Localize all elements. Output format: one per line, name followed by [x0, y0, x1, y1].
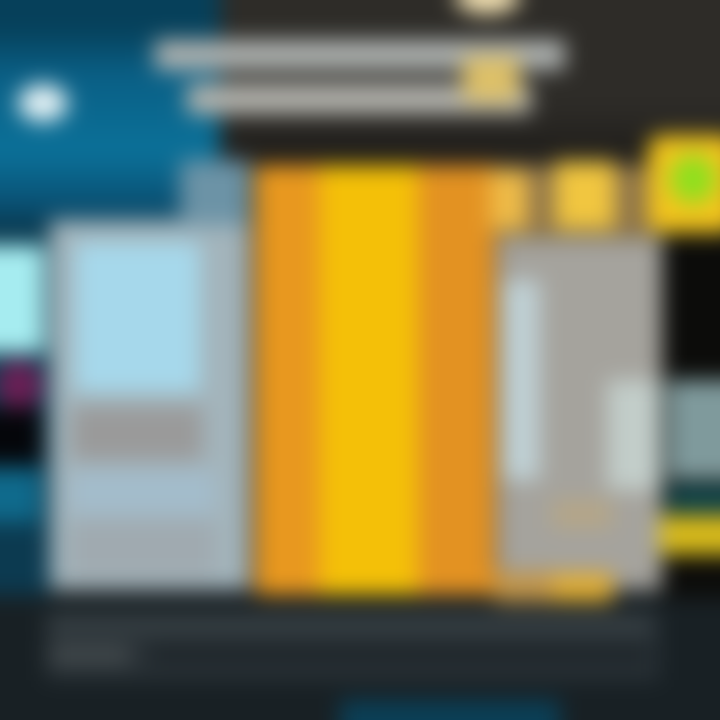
light blue picture: [75, 242, 200, 392]
yellow column: [320, 165, 418, 595]
right column dark area: [662, 238, 720, 598]
panel: left: [50, 220, 250, 590]
right edge grey panel: [668, 380, 720, 480]
footer text block: [45, 610, 660, 680]
light vertical strip: [502, 280, 540, 480]
grey text block: [72, 406, 202, 460]
icon: header white badge: [18, 84, 68, 122]
yellow icon one: [490, 170, 528, 230]
right panel header band: [495, 165, 660, 237]
orange column right: [418, 165, 495, 595]
title block: [138, 23, 580, 131]
panel: right: [497, 238, 662, 590]
left edge black block: [0, 408, 42, 464]
title highlight: [463, 56, 519, 102]
pale box: [607, 380, 662, 490]
footer line two: [50, 646, 130, 664]
icon: top glow: [455, 0, 520, 14]
bottom teal glow: [340, 700, 560, 720]
title line two: [187, 84, 531, 114]
orange column left: [255, 165, 320, 595]
header band: [0, 0, 720, 160]
header teal area: [0, 0, 220, 230]
panel: centre columns: [255, 165, 495, 595]
yellow icon two: [555, 161, 615, 229]
small tan note: [552, 500, 612, 528]
left edge teal block: [0, 470, 40, 522]
left column background: [0, 225, 50, 720]
title line one: [155, 40, 565, 70]
panel top area: [180, 160, 250, 225]
right edge yellow bar: [660, 515, 720, 555]
bottom highlights under columns: [495, 572, 613, 602]
green centre: [670, 155, 716, 203]
yellow foot mark: [553, 574, 613, 602]
bottom band: [0, 595, 720, 720]
footer line three: [150, 648, 650, 660]
blue text block: [70, 470, 215, 515]
callout: yellow and green badge: [648, 135, 720, 233]
left edge cyan block: [0, 245, 44, 353]
lower grey text block: [70, 520, 215, 575]
right edge teal strip: [668, 488, 720, 512]
left edge magenta blob: [0, 360, 42, 410]
footer line one: [50, 618, 650, 632]
